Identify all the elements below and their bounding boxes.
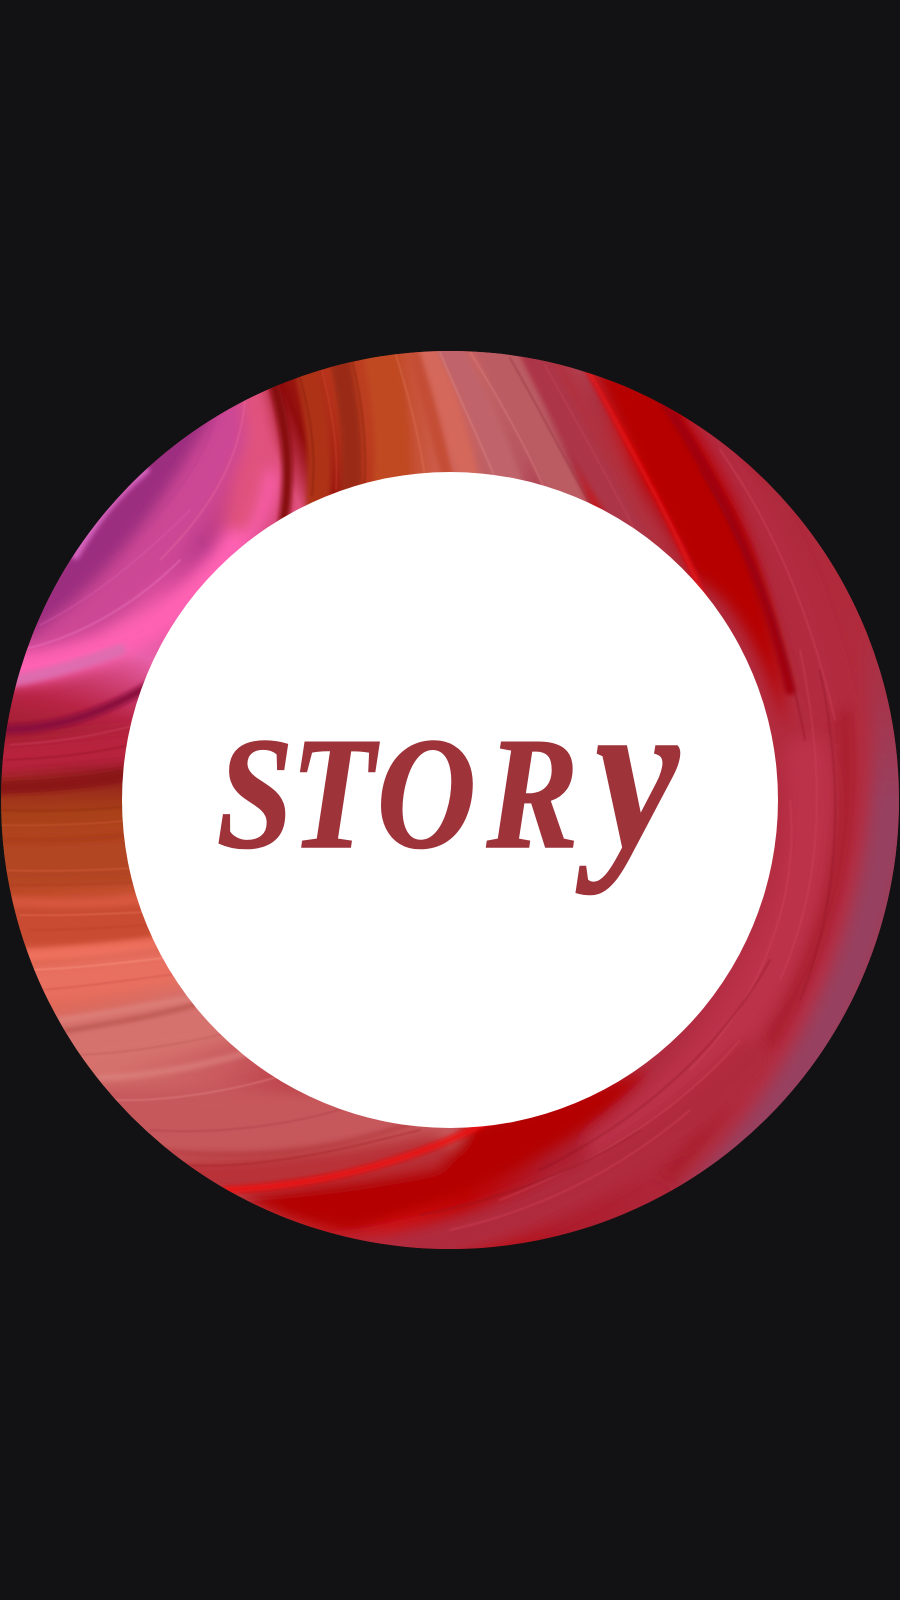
centre white circle — [122, 472, 778, 1128]
right side mauve band — [700, 640, 892, 1200]
crisp streak detail — [0, 335, 790, 1190]
top right deep red — [700, 420, 832, 700]
pink swirl — [0, 375, 240, 665]
swirl ring: painted marbled circle — [1, 351, 899, 1249]
bottom red line and streaks — [225, 1115, 500, 1190]
left horizontal bands — [0, 1115, 430, 1126]
bottom deep red — [300, 1060, 750, 1265]
top fan of streaks — [273, 380, 288, 525]
thin brush hairs — [0, 352, 835, 1230]
broad soft colour bands — [0, 340, 892, 1265]
title: STORY: STORy — [217, 652, 680, 895]
